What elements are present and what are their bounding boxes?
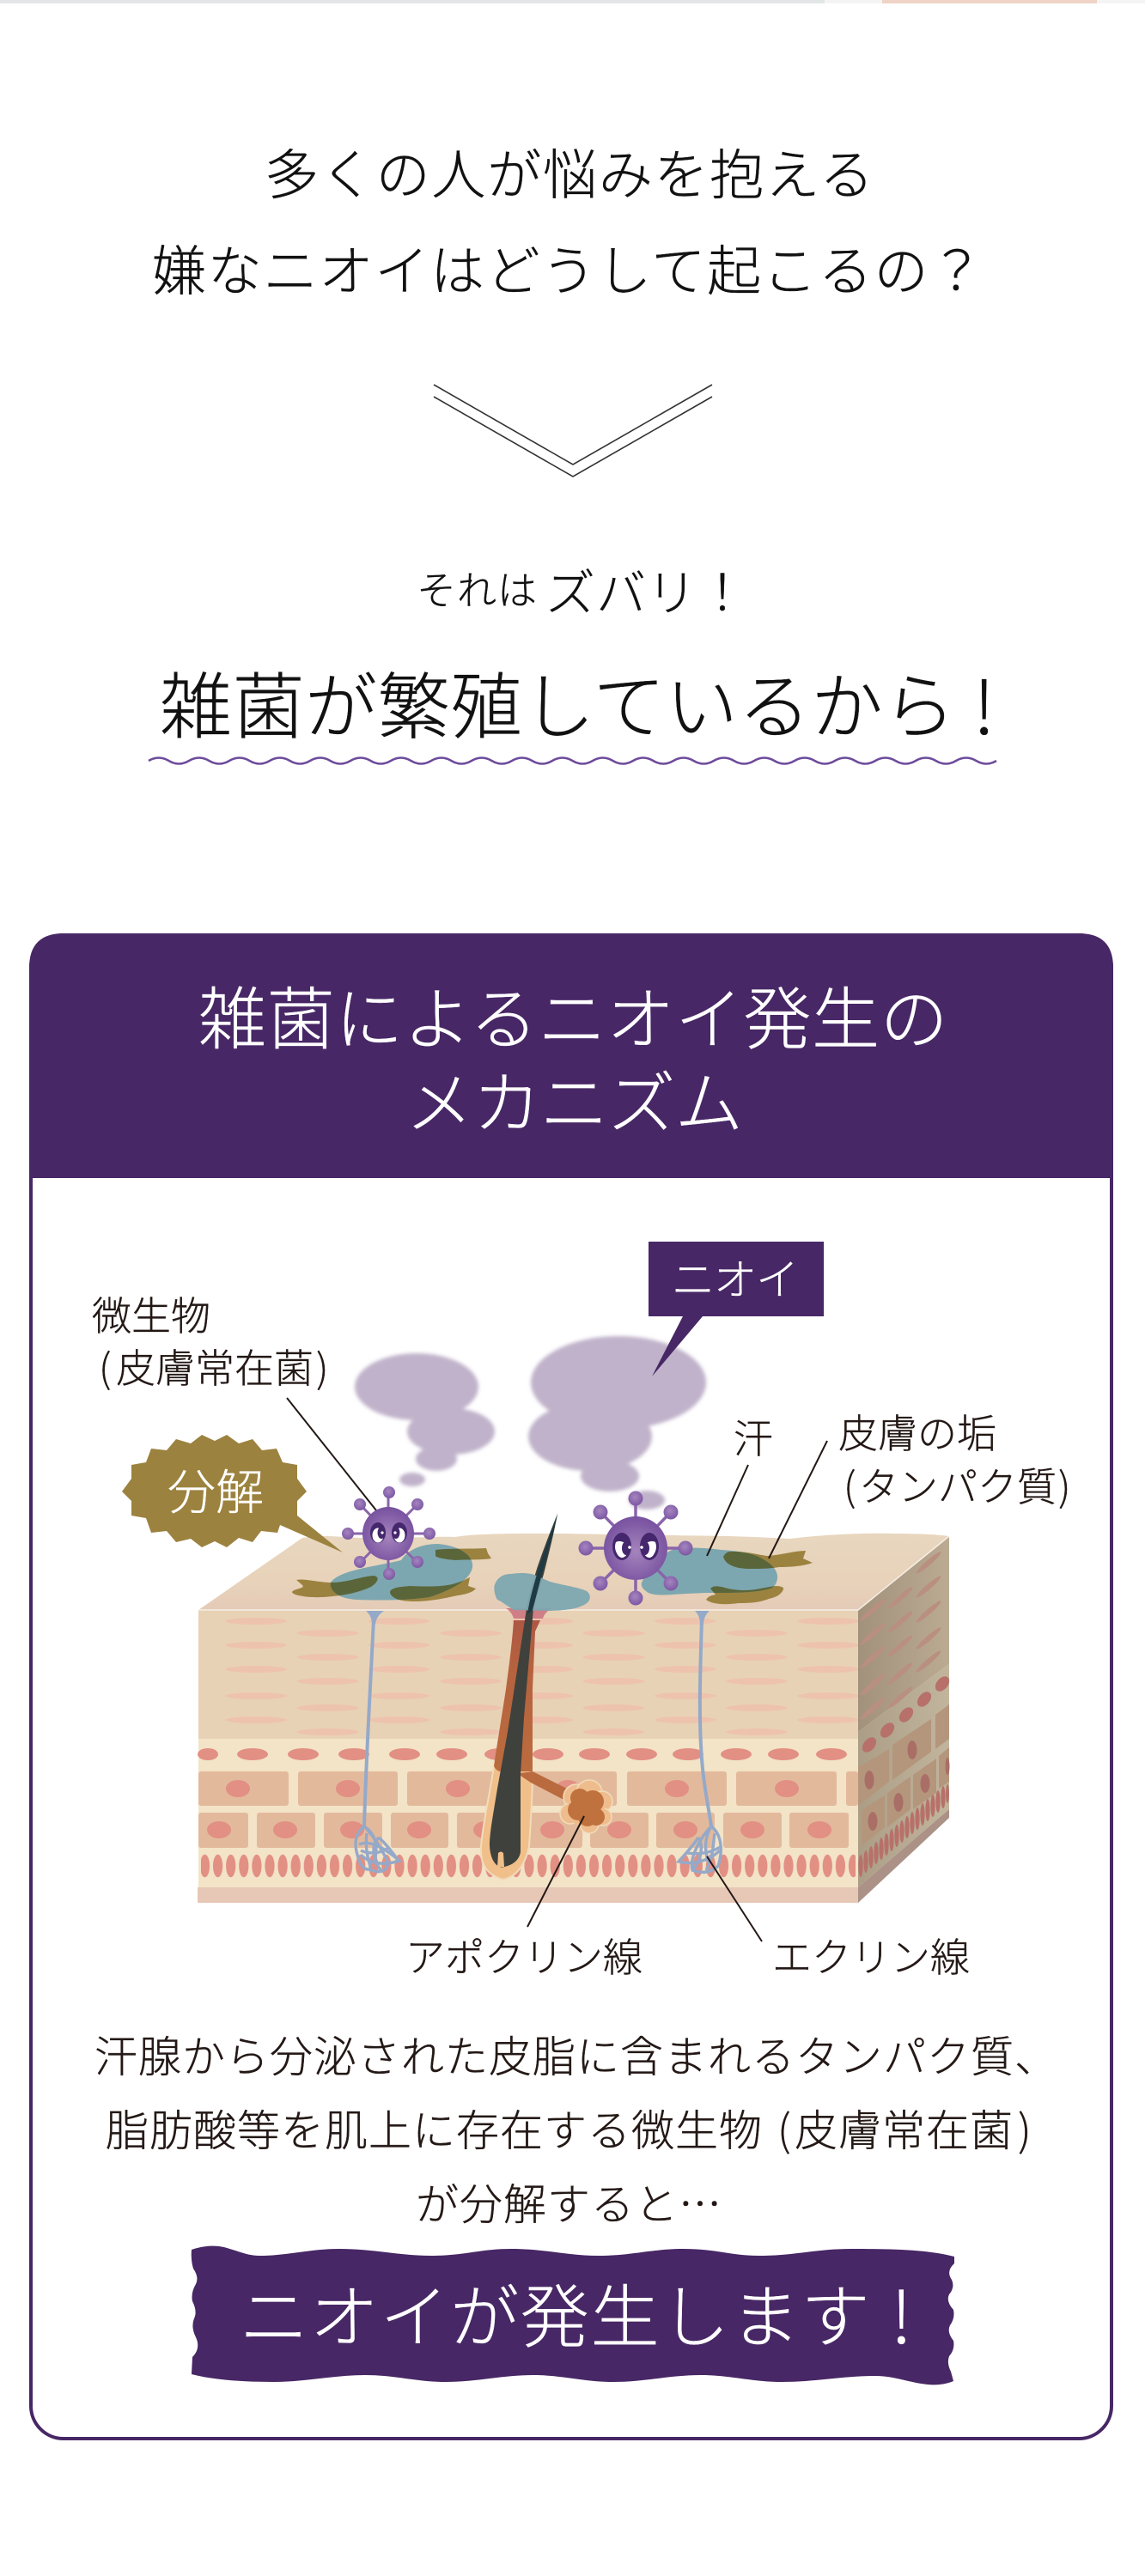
label: microbe: ( xyxy=(99,1338,112,1394)
smell cloud: right xyxy=(528,1336,706,1510)
card outline xyxy=(31,935,1112,2439)
answer heading: ! xyxy=(973,648,995,756)
label: microbe: 微生物 xyxy=(92,1285,210,1342)
sweat (teal) xyxy=(331,1544,777,1601)
callout: decomposition burst: 分解 xyxy=(167,1455,264,1524)
arrow: double chevron xyxy=(434,385,712,477)
follicle lower sheath xyxy=(481,1766,533,1880)
skin edge highlights xyxy=(198,1536,949,1610)
leader line: apocrine xyxy=(527,1816,584,1927)
heading: question xyxy=(152,132,985,307)
explanation text xyxy=(94,2023,1058,2233)
follicle upper sheath xyxy=(494,1620,540,1771)
answer heading: 雑菌が繁殖しているから xyxy=(160,650,956,754)
icon: small germ xyxy=(342,1486,435,1580)
label: microbe: 皮膚常在菌 xyxy=(116,1338,314,1394)
card heading xyxy=(198,964,948,1147)
answer lead xyxy=(417,553,748,625)
label: skin grime: ) xyxy=(1058,1456,1070,1513)
hair tip over sweat xyxy=(527,1514,557,1614)
icon: large germ xyxy=(579,1491,692,1606)
leader line: sweat xyxy=(707,1465,748,1556)
skin side face xyxy=(858,1536,952,1903)
skin residue (olive) xyxy=(292,1548,813,1604)
smell cloud: left xyxy=(355,1353,495,1486)
sweat duct: right xyxy=(679,1611,722,1872)
leader line: skin grime xyxy=(769,1441,827,1558)
label: skin grime: 皮膚の垢 xyxy=(838,1403,996,1460)
banner: result: ニオイが発生します xyxy=(240,2263,871,2362)
hair follicle and apocrine gland xyxy=(481,1514,612,1880)
leader line: microbe xyxy=(287,1398,376,1510)
panel: mechanism card xyxy=(29,933,1113,2439)
overlap shade xyxy=(330,1549,775,1601)
label: eccrine gland: エクリン線 xyxy=(772,1927,970,1984)
heading: question: 多くの人が悩みを抱える xyxy=(265,132,875,210)
gland duct xyxy=(521,1771,574,1803)
callout: decomposition burst xyxy=(122,1435,343,1552)
callout: odor xyxy=(649,1242,824,1376)
explanation text: ( xyxy=(777,2097,792,2159)
cell blocks xyxy=(198,1771,858,1848)
skin top surface xyxy=(198,1534,949,1610)
skin front: dermis xyxy=(198,1610,858,1739)
label: skin grime: タンパク質 xyxy=(859,1456,1057,1513)
hair shaft xyxy=(490,1514,557,1868)
explanation text: 汗腺から分泌された皮脂に含まれるタンパク質、 xyxy=(94,2023,1058,2085)
explanation text: が分解すると… xyxy=(416,2171,722,2233)
wavy underline xyxy=(149,757,996,764)
label: microbe xyxy=(92,1285,328,1394)
card heading: 雑菌によるニオイ発生の xyxy=(198,964,948,1063)
label: skin grime: ( xyxy=(844,1456,856,1513)
sweat duct: left xyxy=(356,1611,399,1872)
nucleus row xyxy=(198,1748,847,1760)
callout: odor: ニオイ xyxy=(672,1246,798,1308)
label: microbe: ) xyxy=(316,1338,328,1394)
heading: question: 嫌なニオイはどうして起こるの？ xyxy=(152,228,985,307)
card header band xyxy=(29,933,1113,1178)
banner: result: ! xyxy=(891,2261,912,2365)
explanation text: 皮膚常在菌 xyxy=(795,2097,1014,2159)
label: skin grime xyxy=(838,1403,1070,1513)
answer lead: それは xyxy=(417,560,538,617)
skin diagram xyxy=(92,1242,1070,1984)
label: sweat: 汗 xyxy=(734,1408,773,1465)
cell nuclei xyxy=(207,1780,831,1838)
top photo strip xyxy=(0,0,1145,3)
skin front: cell band xyxy=(198,1739,858,1887)
basal cell row xyxy=(201,1850,856,1883)
leader line: eccrine xyxy=(707,1856,762,1941)
residue and sweat stains xyxy=(292,1514,813,1614)
label: apocrine gland: アポクリン線 xyxy=(405,1927,643,1984)
banner: result xyxy=(192,2246,954,2385)
explanation text: ) xyxy=(1018,2097,1032,2159)
explanation text: 脂肪酸等を肌上に存在する微生物 xyxy=(106,2097,763,2159)
card heading: メカニズム xyxy=(405,1048,742,1147)
gland xyxy=(560,1780,612,1833)
answer lead: ズバリ！ xyxy=(545,553,748,625)
